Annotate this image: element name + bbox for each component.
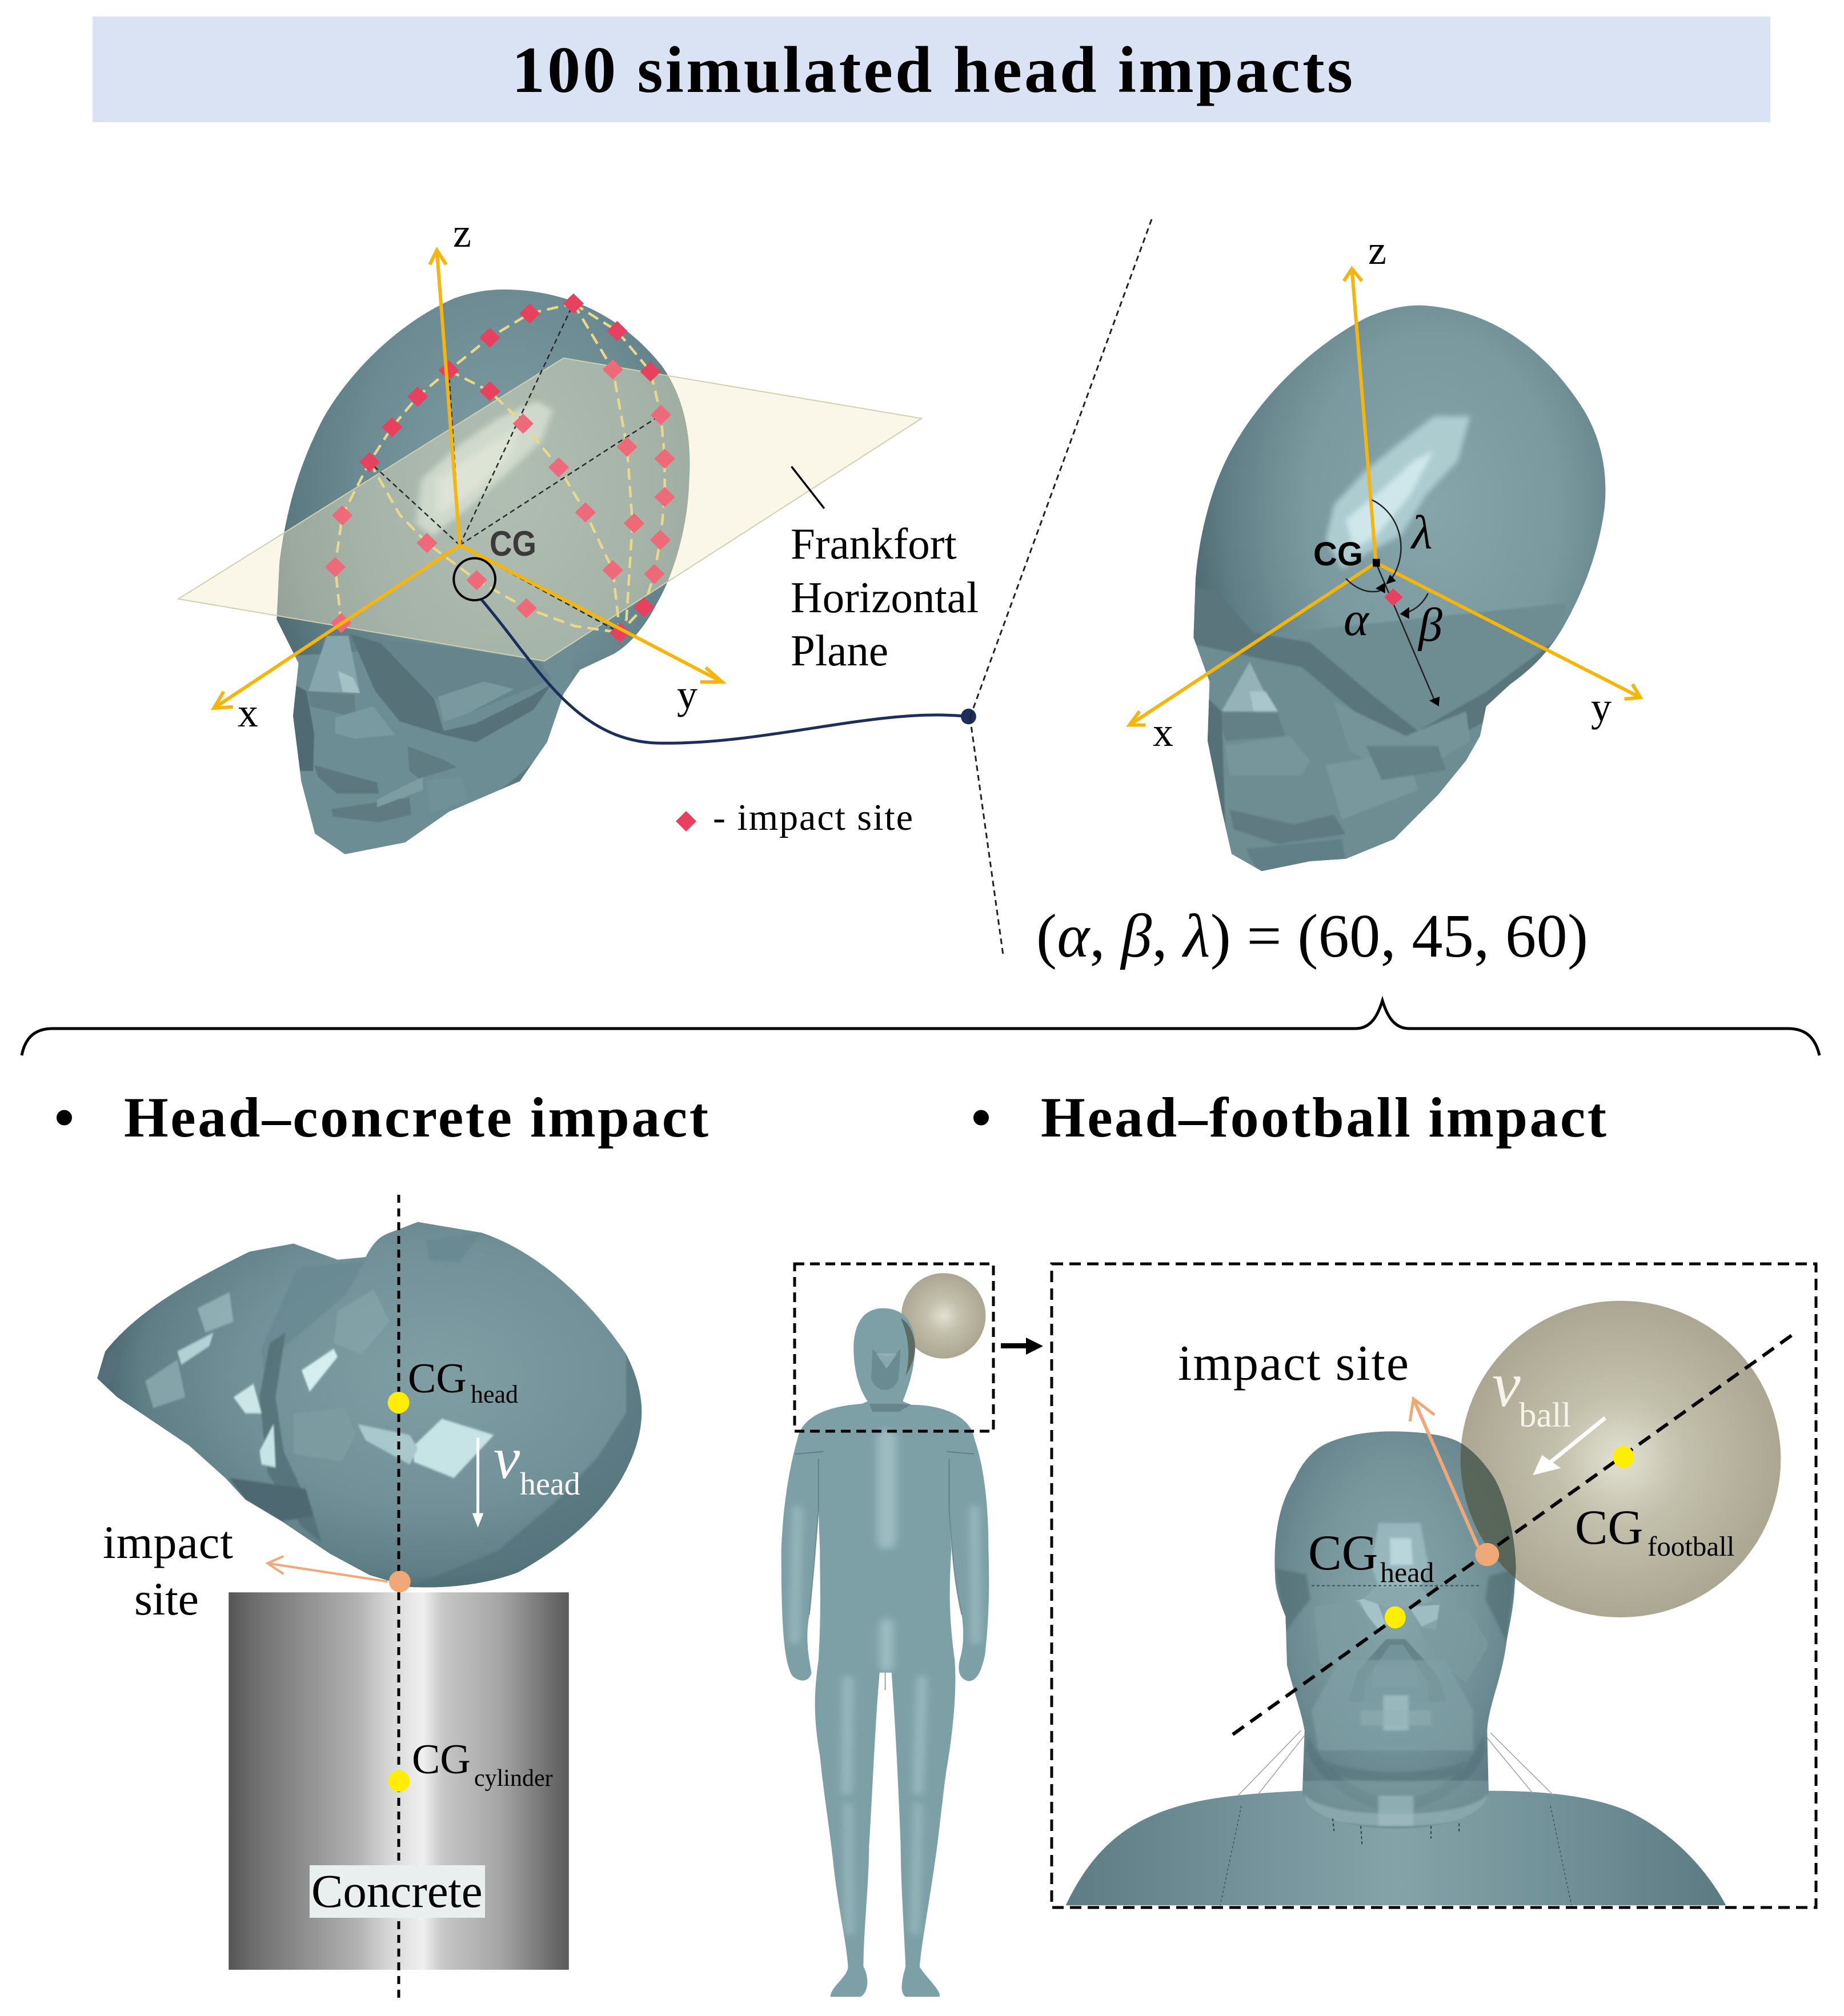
- velocity arrow: [472, 1437, 483, 1528]
- Frankfort plane label: [791, 519, 979, 675]
- axis labels: x: [238, 690, 258, 736]
- axis labels: x: [1153, 709, 1173, 755]
- axis labels: y: [677, 672, 697, 717]
- CG head label: CG: [408, 1355, 467, 1402]
- yellow CG markers: [1385, 1446, 1634, 1628]
- CG head label: [408, 1355, 518, 1408]
- axis labels: [1153, 227, 1612, 755]
- CG football label: [1575, 1500, 1734, 1562]
- cranium highlight: [416, 401, 552, 536]
- impact site label: [103, 1516, 233, 1625]
- CG football label: football: [1647, 1531, 1734, 1562]
- heading: head-football impact: •: [971, 1086, 991, 1149]
- impact site grid: [325, 294, 675, 642]
- CG cylinder label: CG: [412, 1736, 471, 1783]
- coordinate axes: [1129, 269, 1641, 725]
- axis labels: z: [453, 210, 471, 256]
- heading: head-concrete impact: Head–concrete impact: [124, 1086, 708, 1149]
- Frankfort horizontal plane: [178, 358, 921, 661]
- small dashed box: [795, 1264, 993, 1431]
- impact site label: impact: [103, 1516, 233, 1568]
- concrete cylinder: [229, 1592, 569, 1970]
- impact site label: site: [134, 1573, 199, 1625]
- impact axis: [1233, 1335, 1793, 1734]
- velocity label: v: [494, 1425, 520, 1491]
- panel: head with impact angles: [1129, 227, 1641, 888]
- small football: [901, 1273, 985, 1359]
- CG head label: head: [471, 1380, 518, 1408]
- center line: [398, 1195, 400, 1999]
- impact site arrow and marker: [1410, 1399, 1499, 1566]
- axis labels: z: [1368, 227, 1386, 273]
- coordinate axes: [214, 250, 722, 708]
- zoom arrow: [1001, 1338, 1043, 1355]
- CG cylinder label: [412, 1736, 553, 1792]
- title banner: [93, 17, 1770, 122]
- angle symbols: β: [1417, 599, 1442, 652]
- full body model: [781, 1308, 989, 1997]
- rotated head: [97, 1222, 642, 1588]
- concrete label: Concrete: [311, 1865, 483, 1917]
- angle symbols: λ: [1410, 506, 1432, 559]
- panel: head-football impact: [781, 1264, 1816, 1997]
- large dashed box: [1052, 1264, 1816, 1907]
- CG label: CG: [490, 524, 536, 564]
- Frankfort plane label: Frankfort: [791, 519, 957, 568]
- axis labels: [238, 210, 697, 736]
- dashed zoom connector lines: [970, 219, 1152, 955]
- axis labels: y: [1591, 684, 1612, 730]
- curly brace: [22, 1001, 1819, 1055]
- ball and head overlap: [1460, 1444, 1516, 1579]
- velocity label: head: [520, 1467, 580, 1502]
- yellow CG markers: [388, 1392, 410, 1792]
- heading: head-football impact: Head–football impact: [1041, 1086, 1606, 1149]
- angle arcs and impact vector: [1346, 500, 1440, 706]
- title banner: 100 simulated head impacts: [512, 34, 1353, 107]
- angle symbols: [1344, 506, 1442, 652]
- velocity label: ball: [1519, 1396, 1571, 1435]
- angle equation: (α, β, λ) = (60, 45, 60): [1036, 902, 1588, 970]
- velocity label: [494, 1425, 580, 1502]
- velocity label: v: [1492, 1350, 1521, 1420]
- angle symbols: α: [1344, 593, 1370, 646]
- impact site marker and arrow: [267, 1556, 411, 1592]
- highlighted impact site and connector curve: [454, 467, 976, 743]
- heading: head-concrete impact: •: [54, 1086, 74, 1149]
- CG label: CG: [1313, 536, 1363, 573]
- cranium highlight: [1326, 416, 1470, 569]
- panel: head with impact sites on the Frankfort plane: [178, 210, 979, 866]
- neck and brow details: [1220, 1586, 1572, 1905]
- panel: head-concrete impact: [97, 1195, 650, 1999]
- velocity arrow: [1533, 1418, 1605, 1475]
- CG head label: head: [1380, 1556, 1434, 1588]
- Frankfort plane label: Plane: [791, 626, 888, 675]
- Frankfort plane label: Horizontal: [791, 573, 979, 622]
- football: [1461, 1301, 1781, 1617]
- impact site legend: - impact site: [713, 797, 913, 838]
- body shading: [795, 1318, 976, 1931]
- velocity label: [1492, 1350, 1571, 1435]
- face mesh shading: [1276, 1523, 1516, 1831]
- impact site label: impact site: [1178, 1336, 1409, 1391]
- CG football label: CG: [1575, 1500, 1643, 1555]
- CG head label: [1308, 1525, 1434, 1588]
- CG cylinder label: cylinder: [474, 1765, 553, 1792]
- CG head label: CG: [1308, 1525, 1378, 1581]
- head and shoulders model: [1066, 1431, 1726, 1905]
